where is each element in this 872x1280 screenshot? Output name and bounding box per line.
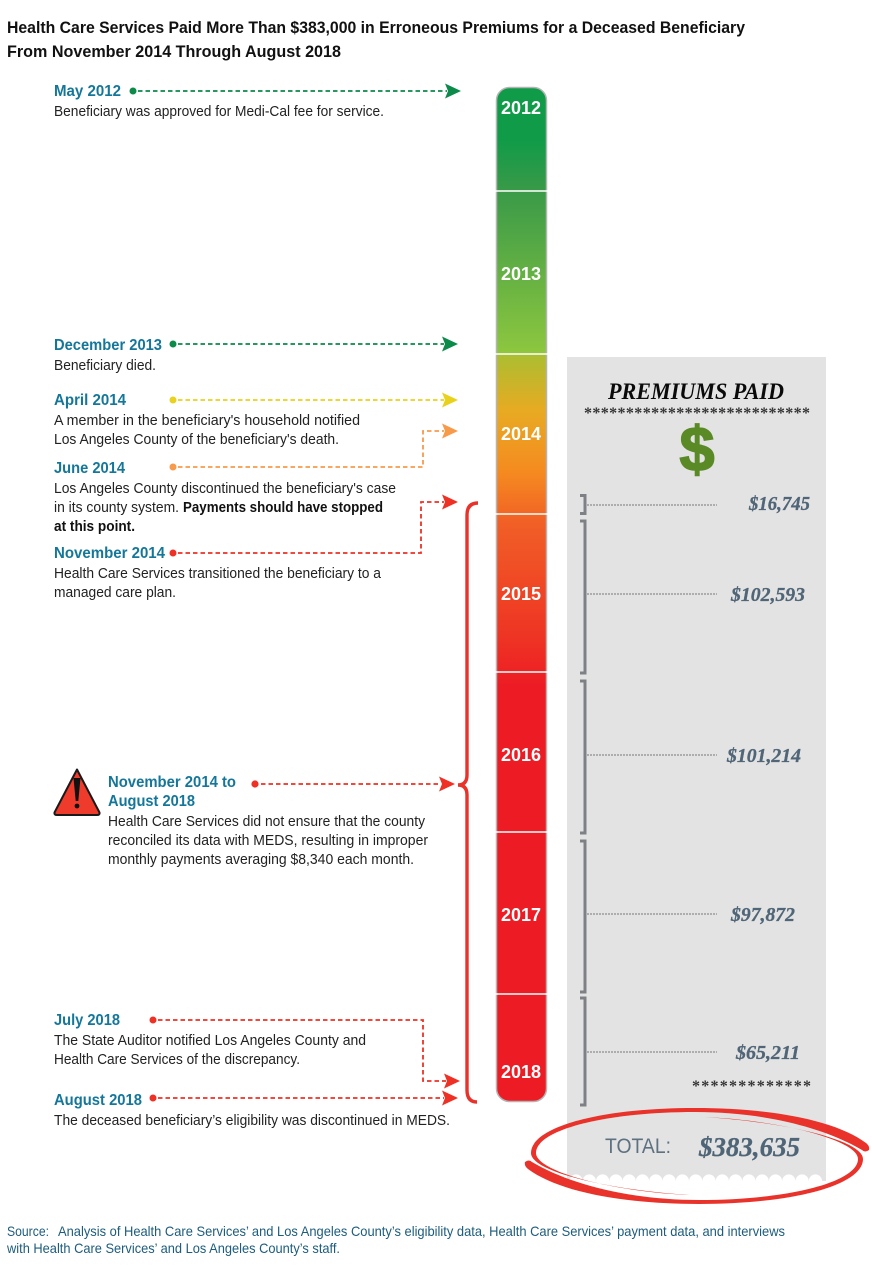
receipt panel: premiums paid (567, 357, 826, 1188)
arrow: July 2018 (150, 1016, 460, 1088)
icon: dollar sign: $ (679, 415, 715, 485)
event: April 2014: A member in the beneficiary's household notified (54, 413, 360, 429)
event: November 2014 to August 2018: November 2014 to (108, 774, 236, 791)
event: August 2018: The deceased beneficiary’s eligibility was discontinued in MEDS. (54, 1113, 450, 1129)
title: Health Care Services Paid More Than $383,000 in Erroneous Premiums for a Deceased Beneficiary (7, 18, 745, 37)
receipt stars bottom: ************* (692, 1078, 811, 1095)
premium row: $97,872: $97,872 (730, 904, 795, 926)
year bar: 2015 (501, 584, 541, 604)
premium row: $101,214: $101,214 (726, 745, 801, 767)
title: From November 2014 Through August 2018 (7, 42, 341, 61)
event: November 2014: November 2014 (54, 545, 165, 562)
red brace (458, 503, 478, 1102)
total amount: $383,635 (698, 1132, 800, 1162)
year bar: 2016 (501, 745, 541, 765)
event: November 2014 to August 2018: reconciled its data with MEDS, resulting in improper (108, 833, 428, 849)
event: December 2013: Beneficiary died. (54, 358, 156, 374)
premium row: $102,593: $102,593 (730, 584, 805, 606)
event: June 2014: at this point. (54, 519, 135, 535)
event: June 2014: June 2014 (54, 460, 125, 477)
total label: TOTAL: (605, 1135, 671, 1158)
premium row: $102,593 (580, 521, 805, 673)
event: May 2012: May 2012 (54, 83, 121, 100)
event: May 2012 (54, 83, 384, 120)
event: November 2014: Health Care Services transitioned the beneficiary to a (54, 566, 382, 582)
event: December 2013: December 2013 (54, 337, 162, 354)
event: June 2014: in its county system. (54, 500, 179, 516)
year bar: 2013 (501, 264, 541, 284)
premium row: $65,211: $65,211 (735, 1042, 800, 1064)
event: July 2018: July 2018 (54, 1012, 120, 1029)
event: August 2018 (54, 1092, 450, 1129)
premium row: $16,745: $16,745 (748, 493, 810, 515)
arrow: November 2014 to August 2018 (251, 776, 455, 792)
event: July 2018 (54, 1012, 366, 1068)
event: June 2014: Payments should have stopped (183, 500, 383, 516)
event: April 2014: Los Angeles County of the beneficiary's death. (54, 432, 339, 448)
red hand-drawn circle around total (525, 1108, 869, 1204)
event: June 2014: Los Angeles County discontinued the beneficiary's case (54, 481, 396, 497)
event: May 2012: Beneficiary was approved for Medi-Cal fee for service. (54, 104, 384, 120)
year bar: 2012 (501, 98, 541, 118)
event: June 2014 (54, 460, 396, 535)
premium row: $97,872 (580, 841, 795, 992)
event: July 2018: The State Auditor notified Los Angeles County and (54, 1033, 366, 1049)
event: August 2018: August 2018 (54, 1092, 142, 1109)
arrow: August 2018 (150, 1090, 458, 1106)
arrow: November 2014 (170, 494, 458, 556)
year bar: 2017 (501, 905, 541, 925)
icon: warning triangle (54, 770, 100, 815)
premium row: $65,211 (580, 998, 800, 1105)
year bar: 2018 (501, 1062, 541, 1082)
source note: Analysis of Health Care Services’ and Los Angeles County’s eligibility data, Health Care Services’ payment data, and interviews (58, 1223, 785, 1239)
event: November 2014 to August 2018: monthly payments averaging $8,340 each month. (108, 852, 414, 868)
event: November 2014 (54, 545, 382, 601)
event: November 2014: managed care plan. (54, 585, 176, 601)
title (7, 18, 745, 61)
receipt scalloped edge (569, 1174, 822, 1188)
receipt heading: PREMIUMS PAID (607, 379, 784, 404)
event: April 2014 (54, 392, 360, 448)
event: December 2013 (54, 337, 162, 374)
premium row: $16,745 (580, 493, 810, 515)
receipt stars top: *************************** (584, 405, 810, 422)
year bar (495, 88, 548, 1102)
arrow: June 2014 (170, 424, 458, 470)
arrow: April 2014 (170, 392, 458, 408)
source note (6, 1223, 785, 1256)
source note: Source: (7, 1223, 49, 1239)
event: November 2014 to August 2018: Health Care Services did not ensure that the county (108, 814, 426, 830)
arrow: December 2013 (170, 336, 458, 352)
event: November 2014 to August 2018 (108, 774, 428, 868)
year bar: 2014 (501, 424, 541, 444)
source note: with Health Care Services’ and Los Angeles County’s staff. (6, 1240, 340, 1256)
arrow: May 2012 (130, 84, 461, 98)
premium row: $101,214 (580, 681, 801, 833)
event: April 2014: April 2014 (54, 392, 126, 409)
event: November 2014 to August 2018: August 2018 (108, 793, 195, 810)
event: July 2018: Health Care Services of the discrepancy. (54, 1052, 300, 1068)
